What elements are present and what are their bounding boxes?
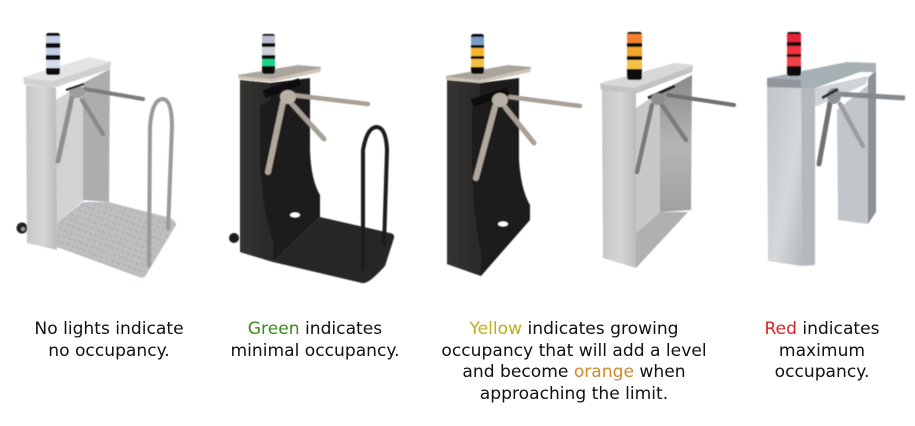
top cap: [238, 65, 321, 82]
back wall: [660, 75, 692, 212]
side of front leg: [801, 88, 815, 266]
arms: [838, 94, 905, 98]
caption: no lights: [34, 319, 184, 361]
arms: [85, 89, 143, 99]
caption: red: [764, 319, 880, 382]
top cap: [600, 63, 693, 94]
arms: [264, 82, 300, 94]
turnstile 4: orange: [600, 32, 734, 268]
beacon: [471, 34, 484, 74]
wheel: [16, 222, 28, 234]
caption: green: [230, 319, 400, 361]
turnstile 3: yellow: [446, 34, 580, 276]
beam underside: [815, 76, 868, 107]
beacon: [46, 33, 60, 75]
caption: yellow and orange: approaching the limit.: [480, 384, 668, 404]
beacon: [262, 34, 275, 74]
caption: red: maximum: [779, 341, 865, 361]
beacon: [787, 32, 801, 76]
caption: yellow and orange: occupancy that will add a level: [441, 341, 707, 361]
front leg: [767, 87, 802, 266]
body: [240, 78, 320, 262]
top cap: [23, 57, 111, 88]
hoop: [149, 99, 172, 267]
hoop: [363, 127, 387, 270]
back leg: [837, 85, 868, 224]
caption: green: Green indicates: [248, 319, 382, 339]
arms: [472, 91, 508, 103]
caption: red: Red indicates: [764, 319, 880, 339]
caption: yellow and orange: [441, 319, 707, 404]
caption: yellow and orange: and become orange when: [462, 362, 686, 382]
floor mat: [273, 217, 394, 283]
caption: no lights: no occupancy.: [48, 341, 170, 361]
column: [602, 90, 636, 268]
caption: yellow and orange: Yellow indicates growing: [469, 319, 679, 339]
wheel: [229, 233, 239, 243]
caption: green: minimal occupancy.: [230, 341, 400, 361]
body: [447, 78, 530, 276]
arms: [648, 86, 675, 98]
floor plate: [57, 202, 176, 278]
column: [26, 85, 57, 250]
beacon: [627, 32, 642, 80]
top cap: [446, 65, 531, 83]
turnstile 1: no lights: [16, 33, 176, 278]
caption: red: occupancy.: [775, 362, 869, 382]
caption: no lights: No lights indicate: [34, 319, 184, 339]
turnstile 5: red: [767, 32, 905, 266]
turnstile 2: green: [229, 34, 394, 283]
top cap: [767, 62, 876, 88]
inner wall: [56, 83, 83, 224]
